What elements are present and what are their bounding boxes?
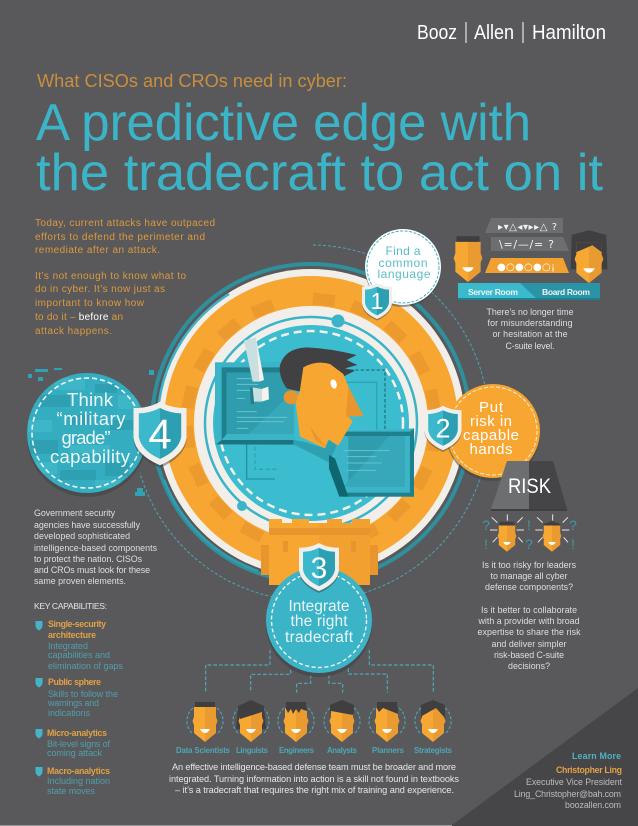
bubble 2: put risk in capable hands (446, 384, 540, 481)
head (280, 347, 363, 448)
risk text: Is it better to collaborate (481, 605, 577, 615)
badge 3 (299, 543, 339, 593)
capability: public sphere: Skills to follow the (48, 689, 118, 699)
intro text: It’s not enough to know what to (35, 271, 186, 282)
right face: board room (571, 230, 607, 283)
team paragraph: An effective intelligence-based defense team must be broader and more (172, 762, 456, 772)
badge 1: 1 (371, 288, 383, 314)
team head: strategists (415, 700, 451, 742)
risk weight: RISK (508, 475, 551, 498)
capability: public sphere: indications (48, 708, 90, 718)
key capabilities heading: KEY CAPABILITIES: (34, 601, 107, 611)
contact block: Executive Vice President (526, 777, 623, 787)
intro text: to do it – before an (35, 312, 123, 323)
subtitle: What CISOs and CROs need in cyber: (37, 70, 347, 91)
contact block: Christopher Ling (556, 765, 622, 775)
team paragraph: – it’s a tradecraft that requires the right mix of training and experience. (175, 785, 454, 795)
bubble 1: find a common language (365, 229, 441, 307)
stressed leaders under risk: ! (484, 536, 488, 552)
government text: Government security (34, 508, 116, 518)
bubble 1: find a common language: language (378, 267, 431, 281)
risk text: risk-based C-suite (494, 650, 564, 660)
right screen (330, 428, 414, 497)
intro text: important to know how (35, 298, 145, 309)
team head: planners (369, 702, 405, 742)
team paragraph: integrated. Turning information into action is a skill not found in textbooks (169, 774, 459, 784)
bubble 2: put risk in capable hands: risk in (470, 413, 512, 430)
bubble 3: integrate the right tradecraft: tradecraft (285, 629, 354, 646)
capability: macro-analytics: Including nation (47, 776, 110, 786)
caption: common language: There’s no longer time (486, 307, 574, 317)
team head: linguists (233, 700, 269, 742)
capability: single-security architecture: capabilities and (48, 650, 110, 660)
bubble 3: integrate the right tradecraft (266, 567, 372, 677)
capability: public sphere (36, 677, 118, 718)
contact block (514, 751, 623, 810)
stressed leaders under risk: ! (527, 517, 531, 533)
risk text: decisions? (508, 661, 550, 671)
team connector lines (206, 650, 433, 693)
risk text (478, 560, 581, 671)
capability: micro-analytics (36, 728, 110, 758)
government text: developed sophisticated (34, 531, 130, 541)
risk text: expertise to share the risk (478, 627, 581, 637)
team labels: Planners (372, 746, 405, 755)
bubble 4: think military grade capability: Think (67, 389, 114, 410)
risk text: with a provider with broad (478, 616, 580, 626)
government text: and CROs must look for these (34, 565, 150, 575)
badge 3: 3 (311, 552, 327, 585)
team head: engineers (278, 702, 314, 742)
intro text: efforts to defend the perimeter and (35, 232, 205, 243)
government text: agencies have successfully (34, 520, 141, 530)
central ring graphic (152, 264, 470, 582)
bubble 2: put risk in capable hands: capable (463, 427, 519, 444)
capability: micro-analytics: Bit-level signs of (47, 739, 110, 749)
logo: Booz Allen Hamilton: Hamilton (532, 22, 606, 44)
team head: analysts (324, 700, 360, 742)
team labels: Linguists (236, 746, 269, 755)
badge 4: 4 (148, 410, 172, 458)
left face: server room (454, 236, 482, 282)
government text: intelligence-based components (34, 543, 158, 553)
risk weight (491, 461, 567, 511)
team labels: Data Scientists (176, 746, 231, 755)
capability: macro-analytics: Macro-analytics (47, 766, 110, 776)
capability: single-security architecture: elimination of gaps (48, 661, 124, 671)
illustration: analyst with screens (215, 337, 414, 497)
dotted orbit (140, 245, 489, 601)
title: the tradecraft to act on it (36, 144, 604, 202)
speech bubbles: garbled language: ●○●○●○¡ (497, 262, 555, 273)
capability: single-security architecture: architecture (48, 630, 96, 640)
bubble 3: integrate the right tradecraft: the right (290, 613, 348, 630)
risk text: to manage all cyber (490, 571, 568, 581)
banner: server room to board room (458, 283, 600, 300)
capability: macro-analytics: state moves (47, 786, 96, 796)
banner: server room to board room: Server Room (468, 287, 518, 297)
caption: common language (486, 307, 574, 351)
exclamation mark (244, 337, 269, 404)
badge 2: 2 (435, 414, 451, 444)
speech bubbles: garbled language: \=/—/= ? (499, 238, 554, 251)
caption: common language: or hesitation at the (492, 329, 568, 339)
bubble 3: integrate the right tradecraft: Integrate (288, 598, 350, 615)
team paragraph (169, 762, 459, 795)
intro text (35, 218, 215, 337)
bubble 1: find a common language: common (378, 256, 428, 270)
left screen (215, 362, 295, 445)
title: A predictive edge with (36, 94, 531, 152)
government text: same proven elements. (34, 576, 126, 586)
stressed leaders under risk (482, 514, 577, 552)
team labels: Engineers (279, 746, 315, 755)
team labels (176, 746, 453, 755)
title (36, 94, 604, 202)
risk text: defense components? (485, 582, 573, 592)
badge 1 (362, 283, 392, 320)
bubble 2: put risk in capable hands: Put (479, 399, 504, 416)
speech bubbles: garbled language: ▸▾△◂▾▸▸△ ? (498, 222, 557, 233)
team labels: Strategists (414, 746, 453, 755)
speech bubbles: garbled language (485, 218, 569, 273)
bubble 4: think military grade capability: “military (56, 408, 126, 429)
capability: micro-analytics: coming attack (47, 748, 102, 758)
risk text: Is it too risky for leaders (482, 560, 577, 570)
bubble 4: think military grade capability: grade” (62, 427, 110, 448)
badge 2 (424, 406, 462, 452)
contact block: boozallen.com (565, 800, 621, 810)
caption: common language: for misunderstanding (488, 318, 573, 328)
government text: to protect the nation. CISOs (34, 554, 143, 564)
bubble 4: think military grade capability (27, 368, 154, 497)
team head: data scientists (187, 702, 223, 742)
collar and tie (293, 439, 337, 463)
risk text: and deliver simpler (492, 639, 567, 649)
stressed leaders under risk: ! (571, 536, 575, 552)
bubble 1: find a common language: Find a (386, 244, 421, 258)
caption: common language: C-suite level. (506, 341, 554, 351)
bubble 2: put risk in capable hands: hands (470, 441, 512, 458)
capability: micro-analytics: Micro-analytics (47, 728, 107, 738)
contact block: Learn More (572, 751, 621, 761)
capability: public sphere: warnings and (47, 698, 99, 708)
logo: Booz Allen Hamilton (417, 22, 606, 44)
stressed leaders under risk: ? (525, 536, 533, 552)
badge 4 (134, 402, 186, 468)
logo: Booz Allen Hamilton: Booz (417, 22, 457, 44)
logo: Booz Allen Hamilton: Allen (474, 22, 514, 44)
capability: single-security architecture: Single-security (48, 619, 106, 629)
bubble 4: think military grade capability: capability (50, 446, 131, 467)
contact block: Ling_Christopher@bah.com (514, 789, 621, 799)
stressed leaders under risk: ? (482, 517, 490, 533)
stressed leaders under risk: ? (569, 517, 577, 533)
team labels: Analysts (327, 746, 358, 755)
intro text: remediate after an attack. (35, 245, 160, 256)
intro text: attack happens. (35, 326, 112, 337)
intro text: do in cyber. It’s now just as (35, 284, 165, 295)
intro text: Today, current attacks have outpaced (35, 218, 215, 229)
capability: public sphere: Public sphere (48, 677, 101, 687)
capability: single-security architecture: Integrated (48, 641, 88, 651)
government text (34, 508, 158, 586)
banner: server room to board room: Board Room (542, 287, 590, 297)
castle (261, 519, 378, 585)
capability: single-security architecture (36, 619, 124, 671)
capability: macro-analytics (36, 766, 110, 796)
